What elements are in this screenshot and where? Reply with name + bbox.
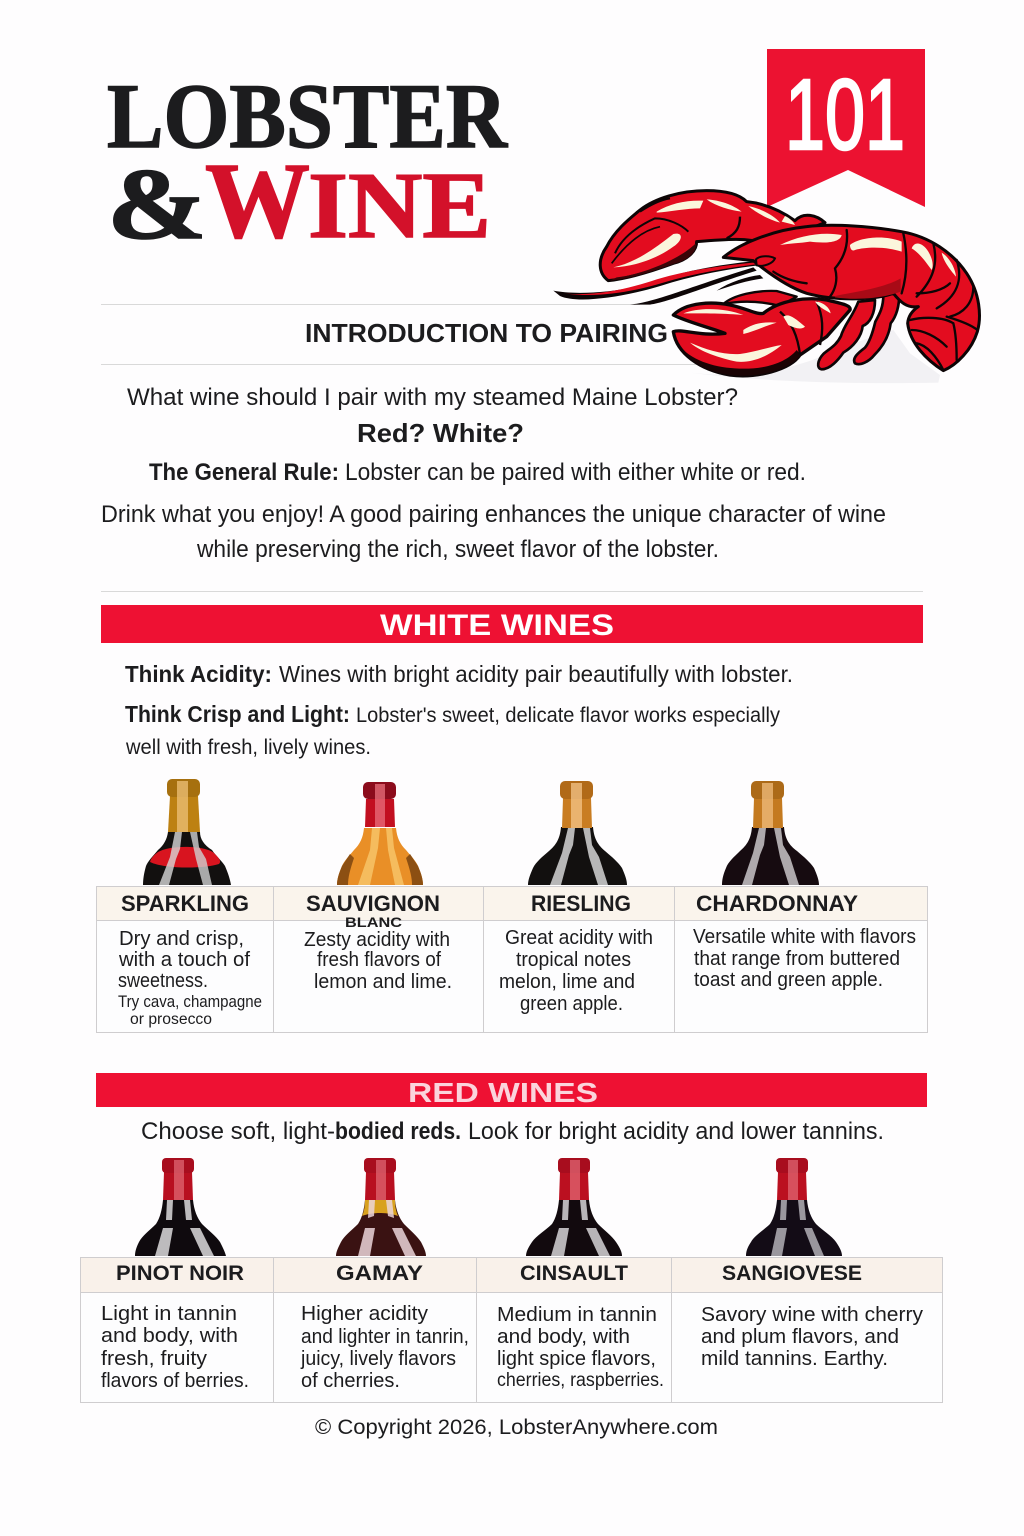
bottle: gamay [336,1158,426,1256]
red wines intro text [141,1118,884,1145]
badge: 101 ribbon: 101 [785,59,905,171]
column: sparkling: SPARKLING [121,891,249,916]
column: chardonnay: that range from buttered [694,948,900,970]
lobster shadow [690,330,940,383]
heading: introduction to pairing: INTRODUCTION TO PAIRING [305,318,668,348]
bottle: pinot noir [135,1158,226,1256]
white wines intro text [125,661,793,759]
lower claw shading [683,350,801,376]
white wines intro text: well with fresh, lively wines. [125,736,371,759]
column: pinot noir: Light in tannin [101,1302,237,1325]
column: sauvignon blanc: lemon and lime. [314,971,452,993]
intro text block [101,384,886,563]
white wines intro text: Wines with bright acidity pair beautifully with lobster. [279,661,793,687]
white wines intro text: Think Acidity: [125,661,272,687]
bottle: sparkling [143,779,231,885]
column: sauvignon blanc: BLANC [345,914,402,930]
column: sparkling: or prosecco [130,1011,212,1028]
intro rule lines [101,304,923,592]
red wines intro text: bodied reds. [335,1118,461,1145]
banner: white wines: WHITE WINES [380,609,614,642]
column: sauvignon blanc: SAUVIGNON [306,891,440,916]
illustration: lobster [553,191,979,383]
copyright: © Copyright 2026, LobsterAnywhere.com [315,1415,718,1439]
title: LOBSTER [107,65,508,167]
intro text block: Red? White? [357,418,524,448]
column: riesling: tropical notes [516,949,631,971]
column: chardonnay: toast and green apple. [694,969,883,991]
column: sparkling: Try cava, champagne [118,993,262,1011]
intro text block: The General Rule: [149,459,339,486]
column: cinsault [497,1262,664,1391]
banner: red wines: RED WINES [408,1077,598,1108]
lobster antennae [553,260,770,305]
column: cinsault: CINSAULT [520,1262,628,1285]
intro text block: while preserving the rich, sweet flavor of the lobster. [196,536,719,563]
column: cinsault: light spice flavors, [497,1348,656,1370]
lobster small legs [723,291,797,306]
banner: white wines [101,605,923,643]
bottle: chardonnay [722,781,819,885]
bottle: sauvignon blanc [337,782,423,885]
column: gamay: juicy, lively flavors [300,1348,456,1370]
column: chardonnay: Versatile white with flavors [693,926,916,948]
column: pinot noir: and body, with [101,1324,238,1347]
column: riesling: Great acidity with [505,927,653,949]
column: chardonnay [693,891,916,991]
column: cinsault: and body, with [497,1325,630,1348]
column: gamay [300,1262,469,1392]
column: riesling: green apple. [520,993,623,1015]
column: pinot noir: PINOT NOIR [116,1262,244,1285]
lobster body and tail [723,225,979,371]
table: red wines [80,1257,943,1402]
upper claw shading [612,198,740,263]
column: pinot noir: flavors of berries. [101,1369,249,1392]
column: sangiovese: Savory wine with cherry [701,1303,924,1326]
lobster shell segments [773,230,977,370]
column: sauvignon blanc: Zesty acidity with [304,929,450,951]
table: white wines [96,886,928,1033]
white wines intro text: Lobster's sweet, delicate flavor works especially [356,704,780,727]
column: sangiovese [701,1262,924,1370]
lobster highlights [613,199,956,362]
column: sauvignon blanc: fresh flavors of [317,949,441,971]
column: pinot noir: fresh, fruity [101,1347,208,1370]
column: sauvignon blanc [304,891,452,993]
column: gamay: Higher acidity [301,1302,429,1325]
column: cinsault: cherries, raspberries. [497,1370,664,1391]
title: INE [308,154,491,258]
column: gamay: and lighter in tanrin, [301,1326,469,1348]
column: cinsault: Medium in tannin [497,1303,657,1326]
column: gamay: GAMAY [336,1262,423,1285]
bottle: riesling [528,781,627,885]
badge: 101 ribbon [767,49,925,207]
banner: red wines [96,1073,927,1108]
lower claw [673,299,850,376]
title [107,65,508,261]
column: riesling [499,891,653,1015]
intro text block: Drink what you enjoy! A good pairing enhances the unique character of wine [101,501,886,528]
column: chardonnay: CHARDONNAY [696,891,858,916]
column: sparkling: sweetness. [118,970,208,992]
intro text block: Lobster can be paired with either white or red. [345,459,806,486]
column: riesling: RIESLING [531,891,631,916]
column: sangiovese: and plum flavors, and [701,1325,899,1348]
column: sparkling: Dry and crisp, [119,928,244,950]
intro text block: What wine should I pair with my steamed Maine Lobster? [127,384,738,411]
column: sparkling: with a touch of [118,949,250,971]
column: sangiovese: SANGIOVESE [722,1262,862,1285]
title: W [205,142,310,261]
column: sangiovese: mild tannins. Earthy. [701,1347,888,1370]
bottle: sangiovese [746,1158,842,1256]
red wines intro text: Choose soft, light- [141,1118,335,1145]
column: sparkling [118,891,262,1028]
column: gamay: of cherries. [301,1369,400,1392]
upper claw [600,191,825,281]
bottle: cinsault [526,1158,622,1256]
column: pinot noir [101,1262,249,1392]
white wines intro text: Think Crisp and Light: [125,701,350,727]
red wines intro text: Look for bright acidity and lower tannins. [468,1118,884,1145]
lobster walking legs [818,293,899,369]
column: riesling: melon, lime and [499,971,635,993]
title: & [107,148,207,261]
